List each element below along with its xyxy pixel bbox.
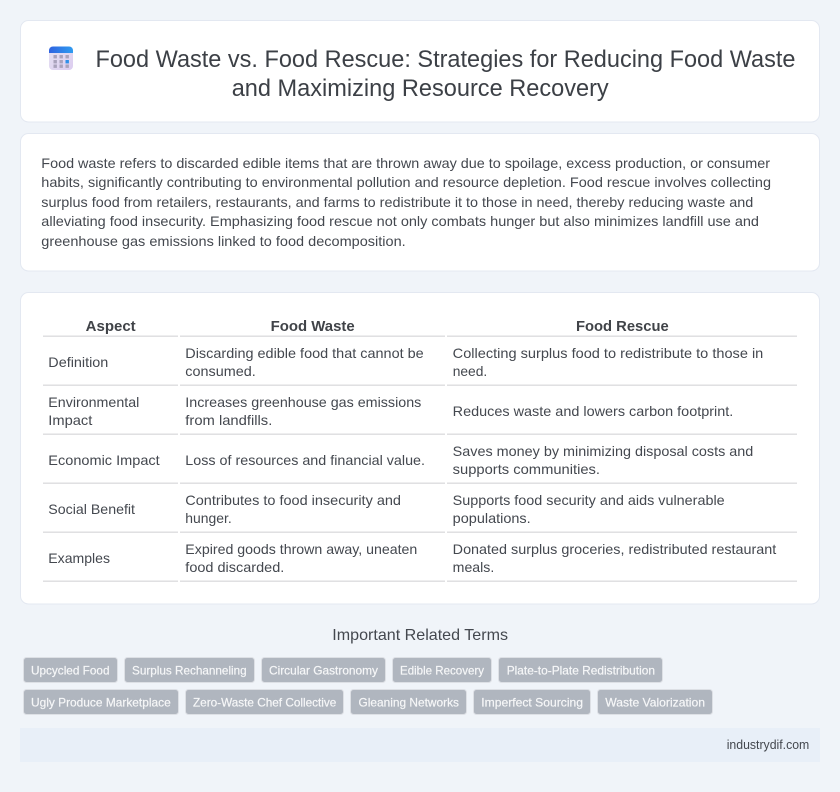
table row: social benefit: Contributes to food insecurity and [185,492,401,508]
table row: social benefit: Supports food security and aids vulnerable [453,492,725,508]
title: Food Waste vs. Food Rescue: Strategies for Reducing Food Waste [96,46,796,73]
tag: Edible Recovery: Edible Recovery [400,663,484,677]
title: and Maximizing Resource Recovery [232,75,609,102]
table row: economic impact: Saves money by minimizing disposal costs and [453,443,753,459]
text block: introduction paragraph: alleviating food insecurity. Emphasizing food rescue not only combats hunger but also minimizes landfill use and [41,213,759,229]
text block: introduction paragraph: habits, significantly contributing to environmental pollution and resource depletion. Food rescue involves collecting [41,174,771,190]
table row: definition: Collecting surplus food to redistribute to those in [453,345,763,361]
tag: Upcycled Food: Upcycled Food [31,663,110,677]
tag: Gleaning Networks [350,690,466,714]
panel: introduction [20,134,820,271]
table row: social benefit [43,492,797,533]
text block: introduction paragraph: surplus food from retailers, restaurants, and farms to redistribute it to those in need, thereby reducing waste and [41,194,753,210]
table header row: Food Rescue [576,319,669,335]
table row: environmental impact [43,394,797,435]
text block: introduction paragraph: Food waste refers to discarded edible items that are thrown away due to spoilage, excess production, or consumer [41,155,770,171]
table row: environmental impact: Increases greenhouse gas emissions [185,394,421,410]
tag: Zero-Waste Chef Collective [186,690,344,714]
tag: Waste Valorization [598,690,712,714]
tag: Zero-Waste Chef Collective: Zero-Waste Chef Collective [193,695,337,709]
table header row [43,319,797,337]
tag: Circular Gastronomy: Circular Gastronomy [269,663,378,677]
table row: economic impact [43,443,797,484]
table row: social benefit: populations. [453,510,531,526]
heading: important related terms: Important Related Terms [332,627,508,644]
panel: comparison table [20,292,820,604]
table row: definition: Definition [48,354,108,370]
table row: social benefit: Social Benefit [48,501,135,517]
icon: calendar [49,46,73,70]
table row: environmental impact: from landfills. [185,412,272,428]
table row: definition: consumed. [185,363,256,379]
table header row: Aspect [86,319,136,335]
table header row: Food Waste [271,319,355,335]
tag list: related terms [24,658,712,714]
table row: social benefit: hunger. [185,510,232,526]
table row: economic impact: Loss of resources and financial value. [185,452,425,468]
tag: Edible Recovery [392,658,492,682]
table row: examples: Donated surplus groceries, redistributed restaurant [453,541,776,557]
tag: Surplus Rechanneling: Surplus Rechanneling [132,663,247,677]
tag: Ugly Produce Marketplace: Ugly Produce Marketplace [31,695,171,709]
tag: Gleaning Networks: Gleaning Networks [358,695,459,709]
table row: examples: Examples [48,550,110,566]
tag: Circular Gastronomy [262,658,386,682]
tag: Plate-to-Plate Redistribution: Plate-to-Plate Redistribution [507,663,655,677]
table row: economic impact: supports communities. [453,461,600,477]
tag: Imperfect Sourcing [474,690,590,714]
table row: definition: need. [453,363,487,379]
panel: header card [20,20,820,122]
table row: examples [43,541,797,582]
table row: examples: Expired goods thrown away, uneaten [185,541,417,557]
title [96,46,796,102]
tag: Surplus Rechanneling [124,658,254,682]
tag: Waste Valorization: Waste Valorization [605,695,705,709]
footer source text: industrydif.com [727,738,809,752]
table row: examples: meals. [453,559,494,575]
table row: definition [43,345,797,386]
footer [20,728,820,762]
text block: introduction paragraph [41,155,771,249]
table row: definition: Discarding edible food that cannot be [185,345,424,361]
table row: economic impact: Economic Impact [48,452,160,468]
tag: Imperfect Sourcing: Imperfect Sourcing [481,695,583,709]
table row: environmental impact: Environmental [48,394,139,410]
text block: introduction paragraph: greenhouse gas emissions linked to food decomposition. [41,233,406,249]
table row: examples: food discarded. [185,559,284,575]
tag: Ugly Produce Marketplace [24,690,178,714]
table row: environmental impact: Reduces waste and lowers carbon footprint. [453,403,733,419]
table row: environmental impact: Impact [48,412,92,428]
tag: Upcycled Food [24,658,118,682]
tag: Plate-to-Plate Redistribution [498,658,662,682]
